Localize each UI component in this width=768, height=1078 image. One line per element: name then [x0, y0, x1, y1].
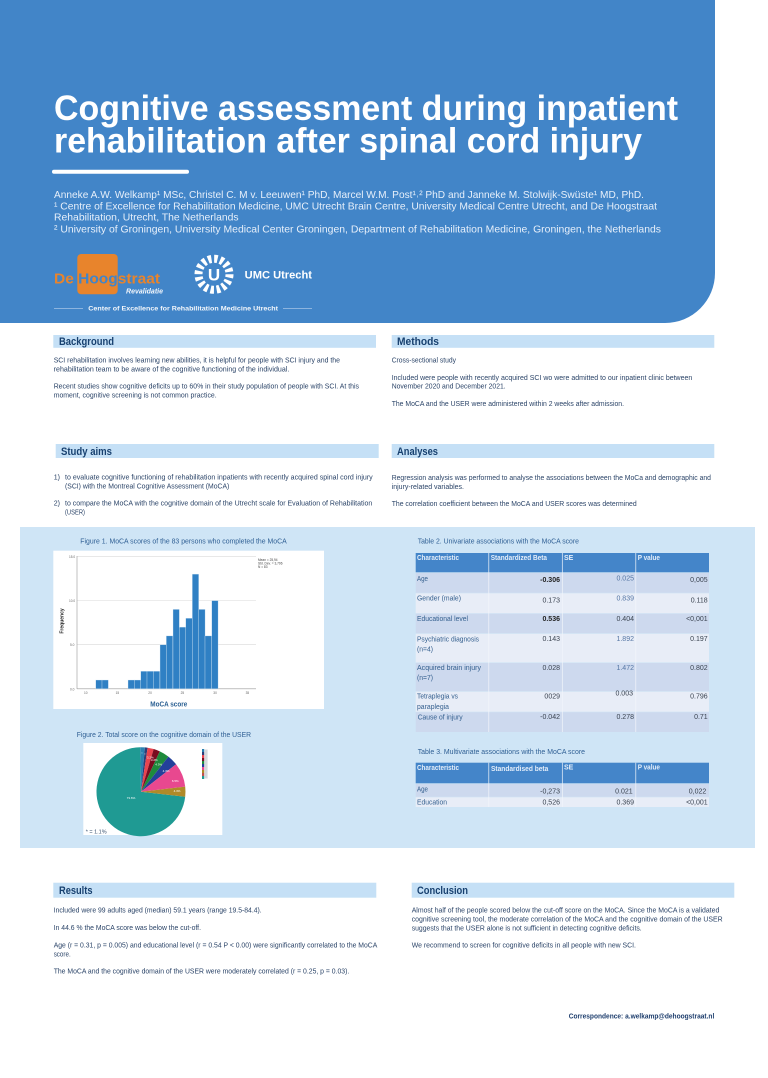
text: methods: The MoCA and the USER were administered within 2 weeks after admission. — [392, 401, 624, 408]
text: methods: November 2020 and December 2021. — [392, 384, 506, 391]
text: methods: Included were people with recently acquired SCI wo were admitted to our inpatient clinic between — [392, 375, 692, 382]
y axis tick labels: 15.0 — [69, 555, 75, 559]
table 2 header: SE — [564, 555, 574, 562]
text: background — [54, 358, 359, 400]
authors and affiliations: ² University of Groningen, University Medical Center Groningen, Department of Rehabilitation Medicine, Groningen, the Netherlands — [54, 223, 661, 235]
row: tetraplegia: 0029 — [544, 694, 560, 701]
list: study aims — [54, 475, 373, 516]
row: tetraplegia: 0.003 — [615, 690, 633, 697]
row: age — [417, 787, 706, 795]
table 3 — [416, 763, 709, 807]
row: psychiatric diagnosis: 0.143 — [542, 636, 560, 643]
text: conclusion — [412, 908, 723, 950]
chart: USER pie — [83, 743, 222, 836]
text: results: score. — [54, 951, 71, 958]
row: psychiatric diagnosis — [417, 636, 708, 653]
table 3 header: Standardised beta — [491, 766, 548, 773]
row: education: 0,526 — [542, 799, 560, 806]
text: background: SCI rehabilitation involves learning new abilities, it is helpful for people with SCI injury and the — [54, 358, 340, 365]
row: gender — [417, 596, 708, 604]
logo: De Hoogstraat: Revalidatie — [126, 288, 163, 295]
row: tetraplegia: 0.796 — [690, 694, 708, 701]
title — [54, 89, 678, 160]
table 3 header: P value — [638, 765, 660, 772]
x axis tick labels — [84, 691, 249, 695]
row: gender: 0.839 — [616, 596, 634, 603]
authors and affiliations: ¹ Centre of Excellence for Rehabilitation Medicine, UMC Utrecht Brain Centre, University Medical Centre Utrecht, and De Hoogstraat — [54, 200, 657, 212]
row: cause of injury — [418, 714, 708, 722]
chart: MoCA histogram — [53, 551, 324, 709]
logo: De Hoogstraat — [54, 254, 163, 295]
x axis tick labels: 10 — [84, 691, 88, 695]
text: background: moment, cognitive screening is not common practice. — [54, 393, 217, 400]
table 2 header: P value — [638, 555, 660, 562]
heading: results — [53, 883, 376, 898]
authors and affiliations — [54, 189, 661, 235]
statistics legend: N = 83 — [258, 565, 268, 569]
list: study aims: to evaluate cognitive functioning of rehabilitation inpatients with recently acquired spinal cord injury — [65, 475, 373, 482]
x axis tick labels: 35 — [246, 691, 249, 695]
authors and affiliations: Anneke A.W. Welkamp¹ MSc, Christel C. M v. Leeuwen¹ PhD, Marcel W.M. Post¹˒² PhD and Janneke M. Stolwijk-Swüste¹ MD, PhD. — [54, 189, 644, 201]
title: rehabilitation after spinal cord injury — [54, 122, 643, 160]
heading: study aims — [56, 444, 379, 458]
y axis tick labels: 10.0 — [69, 599, 75, 603]
row: educational level: 0.404 — [616, 616, 634, 623]
panel: conclusion — [412, 883, 734, 950]
slice labels: 3.2% — [151, 758, 158, 762]
text: conclusion: suggests that the USER alone is not sufficient in detecting cognitive deficits. — [412, 926, 642, 933]
row: acquired brain injury: 1.472 — [616, 665, 634, 672]
text: results: Included were 99 adults aged (median) 59.1 years (range 19.5-84.4). — [54, 908, 262, 915]
text: results — [54, 908, 378, 976]
centre of excellence line: Center of Excellence for Rehabilitation Medicine Utrecht — [88, 305, 279, 312]
row: gender: Gender (male) — [417, 596, 461, 603]
row: age: Age — [417, 787, 428, 794]
text: methods — [392, 358, 692, 408]
table 2 header — [417, 555, 660, 562]
slice labels: 6.5% — [172, 779, 179, 783]
row: cause of injury: Cause of injury — [418, 715, 463, 722]
text: conclusion: Almost half of the people scored below the cut-off score on the MoCA. Since the MoCA is a validated — [412, 908, 719, 915]
text: analyses: The correlation coefficient between the MoCA and USER scores was determined — [392, 501, 637, 508]
table 3 header — [417, 765, 660, 773]
x axis tick labels: 20 — [148, 691, 152, 695]
statistics legend: Std. Dev. = 3,796 — [258, 562, 283, 566]
slice labels — [127, 752, 181, 800]
row: acquired brain injury: (n=7) — [417, 675, 433, 682]
list: study aims: 2) — [54, 501, 60, 508]
row: psychiatric diagnosis: 0.197 — [690, 636, 708, 643]
list: study aims: (USER) — [65, 509, 85, 516]
main slice — [96, 747, 185, 836]
row: educational level — [417, 616, 708, 623]
row: educational level: Educational level — [417, 616, 468, 623]
text: analyses — [392, 475, 711, 508]
table 2 caption: Table 2. Univariate associations with the MoCA score — [418, 538, 579, 545]
heading: conclusion: Conclusion — [417, 885, 468, 897]
figure 1 caption: Figure 1. MoCA scores of the 83 persons who completed the MoCA — [80, 538, 287, 546]
y axis tick labels — [69, 555, 75, 692]
title underline — [52, 170, 189, 174]
pie legend — [202, 749, 208, 779]
panel: methods — [392, 335, 714, 408]
row: age: -0,273 — [540, 788, 560, 795]
heading: methods: Methods — [397, 336, 439, 348]
table 2 header: Characteristic — [417, 555, 459, 562]
row: age: 0,022 — [689, 788, 706, 795]
heading: methods — [392, 335, 714, 348]
row: age: 0.025 — [616, 576, 634, 583]
row: psychiatric diagnosis: 1.892 — [616, 636, 634, 643]
row: tetraplegia — [417, 690, 708, 711]
x axis tick labels: 25 — [181, 691, 184, 695]
row: acquired brain injury: 0.802 — [690, 665, 708, 672]
row: age: -0.306 — [540, 577, 560, 584]
panel: study aims — [54, 444, 379, 516]
row: education: Education — [417, 799, 447, 806]
text: analyses: Regression analysis was performed to analyse the associations between the MoCa and demographic and — [392, 475, 711, 482]
row: age: 0,005 — [690, 577, 708, 584]
table 3 header: SE — [564, 765, 574, 772]
row: educational level: 0.536 — [542, 616, 560, 623]
row: educational level: <0,001 — [686, 616, 708, 623]
row: psychiatric diagnosis: (n=4) — [417, 646, 433, 653]
heading: background — [53, 335, 376, 348]
y axis tick labels: 0.0 — [70, 688, 75, 692]
text: results: The MoCA and the cognitive domain of the USER were moderately correlated (r = 0.25, p = 0.03). — [54, 969, 349, 976]
list: study aims: to compare the MoCA with the cognitive domain of the Utrecht scale for Evaluation of Rehabilitation — [65, 501, 372, 508]
panel: figures and tables — [20, 527, 755, 848]
text: conclusion: cognitive screening tool, the moderate correlation of the MoCA and the cognitive domain of the USER — [412, 917, 723, 924]
row: gender: 0.173 — [542, 597, 560, 604]
heading: conclusion — [412, 883, 734, 898]
slice labels: 4.3% — [163, 769, 170, 773]
slice labels: 3.2% — [147, 755, 154, 759]
statistics legend: Mean = 25,94 — [258, 558, 278, 562]
text: analyses: injury-related variables. — [392, 484, 464, 491]
row: cause of injury: 0.278 — [616, 714, 634, 721]
slice labels: * — [144, 752, 146, 756]
table 3 caption: Table 3. Multivariate associations with the MoCA score — [418, 749, 585, 756]
y axis title: Frequency — [60, 608, 66, 634]
row: gender: 0.118 — [691, 597, 708, 604]
row: psychiatric diagnosis: Psychiatric diagnosis — [417, 636, 479, 643]
logo: UMC Utrecht: U — [208, 266, 220, 284]
heading: background: Background — [59, 336, 114, 348]
pie footnote: * = 1.1% — [86, 829, 107, 835]
x axis tick labels: 30 — [213, 691, 217, 695]
row: age: Age — [417, 576, 428, 583]
list: study aims: (SCI) with the Montreal Cognitive Assessment (MoCA) — [65, 484, 229, 491]
y axis tick labels: 5.0 — [70, 643, 75, 647]
statistics legend — [258, 558, 283, 569]
heading: results: Results — [59, 885, 92, 897]
row: age: 0.021 — [615, 788, 633, 795]
row: tetraplegia: Tetraplegia vs — [417, 694, 458, 701]
row: age — [417, 576, 708, 584]
heading: study aims: Study aims — [61, 446, 112, 458]
figure 2 caption: Figure 2. Total score on the cognitive domain of the USER — [77, 732, 251, 739]
slice labels: 73.6% — [127, 796, 136, 800]
text: conclusion: We recommend to screen for cognitive deficits in all people with new SCI. — [412, 943, 636, 950]
heading: analyses — [392, 444, 714, 458]
logo: De Hoogstraat: De Hoogstraat — [54, 271, 160, 288]
correspondence: Correspondence: a.welkamp@dehoogstraat.nl — [569, 1014, 714, 1021]
text: background: Recent studies show cognitive deficits up to 60% in their study population of people with SCI. At this — [54, 384, 359, 391]
x axis title: MoCA score — [150, 702, 187, 709]
title: Cognitive assessment during inpatient — [54, 89, 678, 128]
row: cause of injury: -0.042 — [540, 714, 560, 721]
text: results: In 44.6 % the MoCA score was below the cut-off. — [54, 925, 201, 932]
slice labels: 4.3% — [155, 762, 162, 766]
header panel — [0, 0, 715, 323]
row: acquired brain injury: Acquired brain injury — [417, 665, 481, 672]
row: education: 0.369 — [616, 799, 634, 806]
row: education: <0,001 — [686, 799, 708, 806]
row: education — [417, 799, 708, 806]
text: methods: Cross-sectional study — [392, 358, 456, 365]
panel: results — [53, 883, 378, 976]
text: results: Age (r = 0.31, p = 0.005) and educational level (r = 0.54 P < 0.00) were significantly correlated to the MoCA — [54, 943, 378, 950]
logo: UMC Utrecht: UMC Utrecht — [245, 269, 312, 281]
list: study aims: 1) — [54, 475, 60, 482]
table 2 header: Standardized Beta — [491, 555, 547, 562]
authors and affiliations: Rehabilitation, Utrecht, The Netherlands — [54, 212, 239, 224]
slice labels: * — [141, 752, 143, 756]
table 3 header: Characteristic — [417, 765, 459, 772]
x axis tick labels: 15 — [116, 691, 119, 695]
panel: background — [53, 335, 376, 400]
text: background: rehabilitation team to be aware of the cognitive functioning of the individual. — [54, 367, 289, 374]
row: acquired brain injury — [417, 665, 708, 682]
panel: analyses — [392, 444, 714, 508]
table 2 — [416, 553, 709, 732]
row: cause of injury: 0.71 — [694, 714, 708, 721]
heading: analyses: Analyses — [397, 446, 438, 458]
row: acquired brain injury: 0.028 — [542, 665, 560, 672]
row: tetraplegia: paraplegia — [417, 704, 449, 711]
slice labels: 4.3% — [174, 789, 181, 793]
logo: UMC Utrecht — [198, 259, 312, 290]
